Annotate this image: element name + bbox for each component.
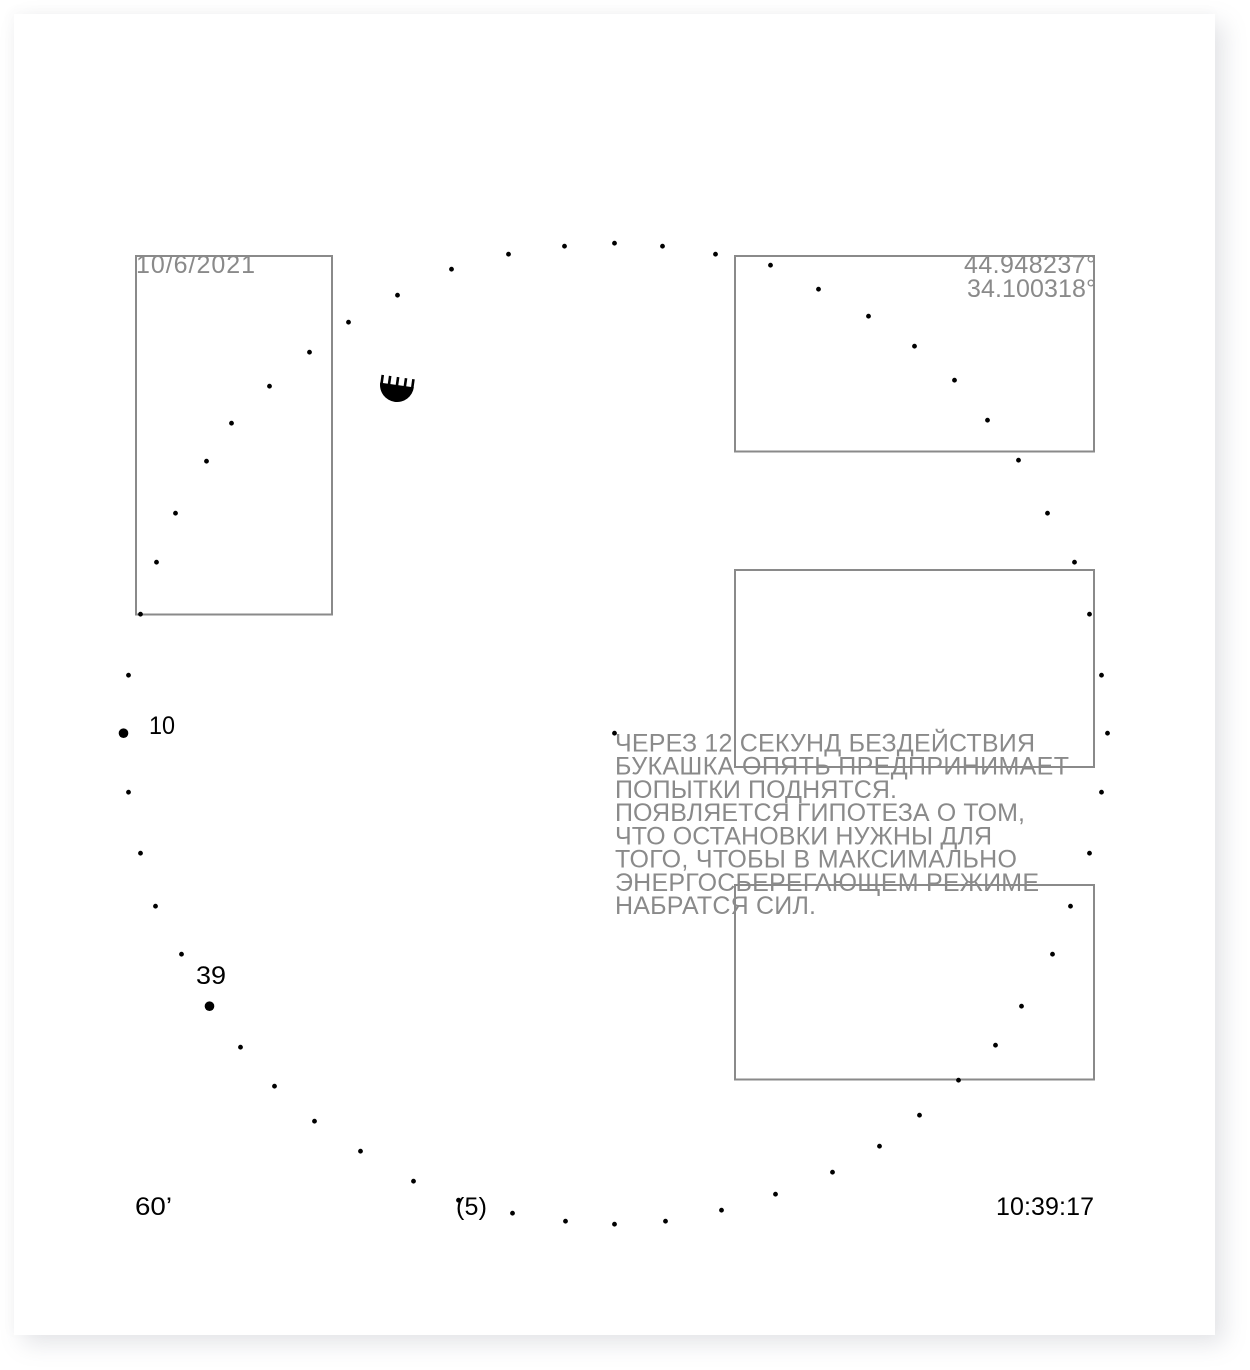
text: coordinates <box>964 251 1096 303</box>
label: time: 10:39:17 <box>996 1193 1094 1221</box>
chart: circular dial of dots <box>119 241 1110 1227</box>
label: 60 minutes: 60’ <box>135 1193 172 1221</box>
label: (5): (5) <box>456 1193 487 1221</box>
text: date: 10/6/2021 <box>136 251 255 279</box>
label: 39: 39 <box>196 962 226 990</box>
panel: rectangular frames <box>136 256 1094 1080</box>
text block: description: ПОЯВЛЯЕТСЯ ГИПОТЕЗА О ТОМ, <box>615 799 1025 827</box>
text: coordinates: 44.948237° <box>964 251 1096 279</box>
text block: description <box>615 728 1069 920</box>
text block: description: БУКАШКА ОПЯТЬ ПРЕДПРИНИМАЕТ <box>615 752 1069 780</box>
icon: half-disc bug with legs <box>378 375 415 404</box>
label: 10: 10 <box>149 712 175 740</box>
text block: description: ТОГО, ЧТОБЫ В МАКСИМАЛЬНО <box>615 846 1017 874</box>
text block: description: НАБРАТСЯ СИЛ. <box>615 892 816 920</box>
text: coordinates: 34.100318° <box>967 275 1096 303</box>
text block: description: ЭНЕРГОСБЕРЕГАЮЩЕМ РЕЖИМЕ <box>615 869 1039 897</box>
text block: description: ЧЕРЕЗ 12 СЕКУНД БЕЗДЕЙСТВИЯ <box>615 728 1035 758</box>
text block: description: ЧТО ОСТАНОВКИ НУЖНЫ ДЛЯ <box>615 822 992 850</box>
text block: description: ПОПЫТКИ ПОДНЯТСЯ. <box>615 776 897 804</box>
